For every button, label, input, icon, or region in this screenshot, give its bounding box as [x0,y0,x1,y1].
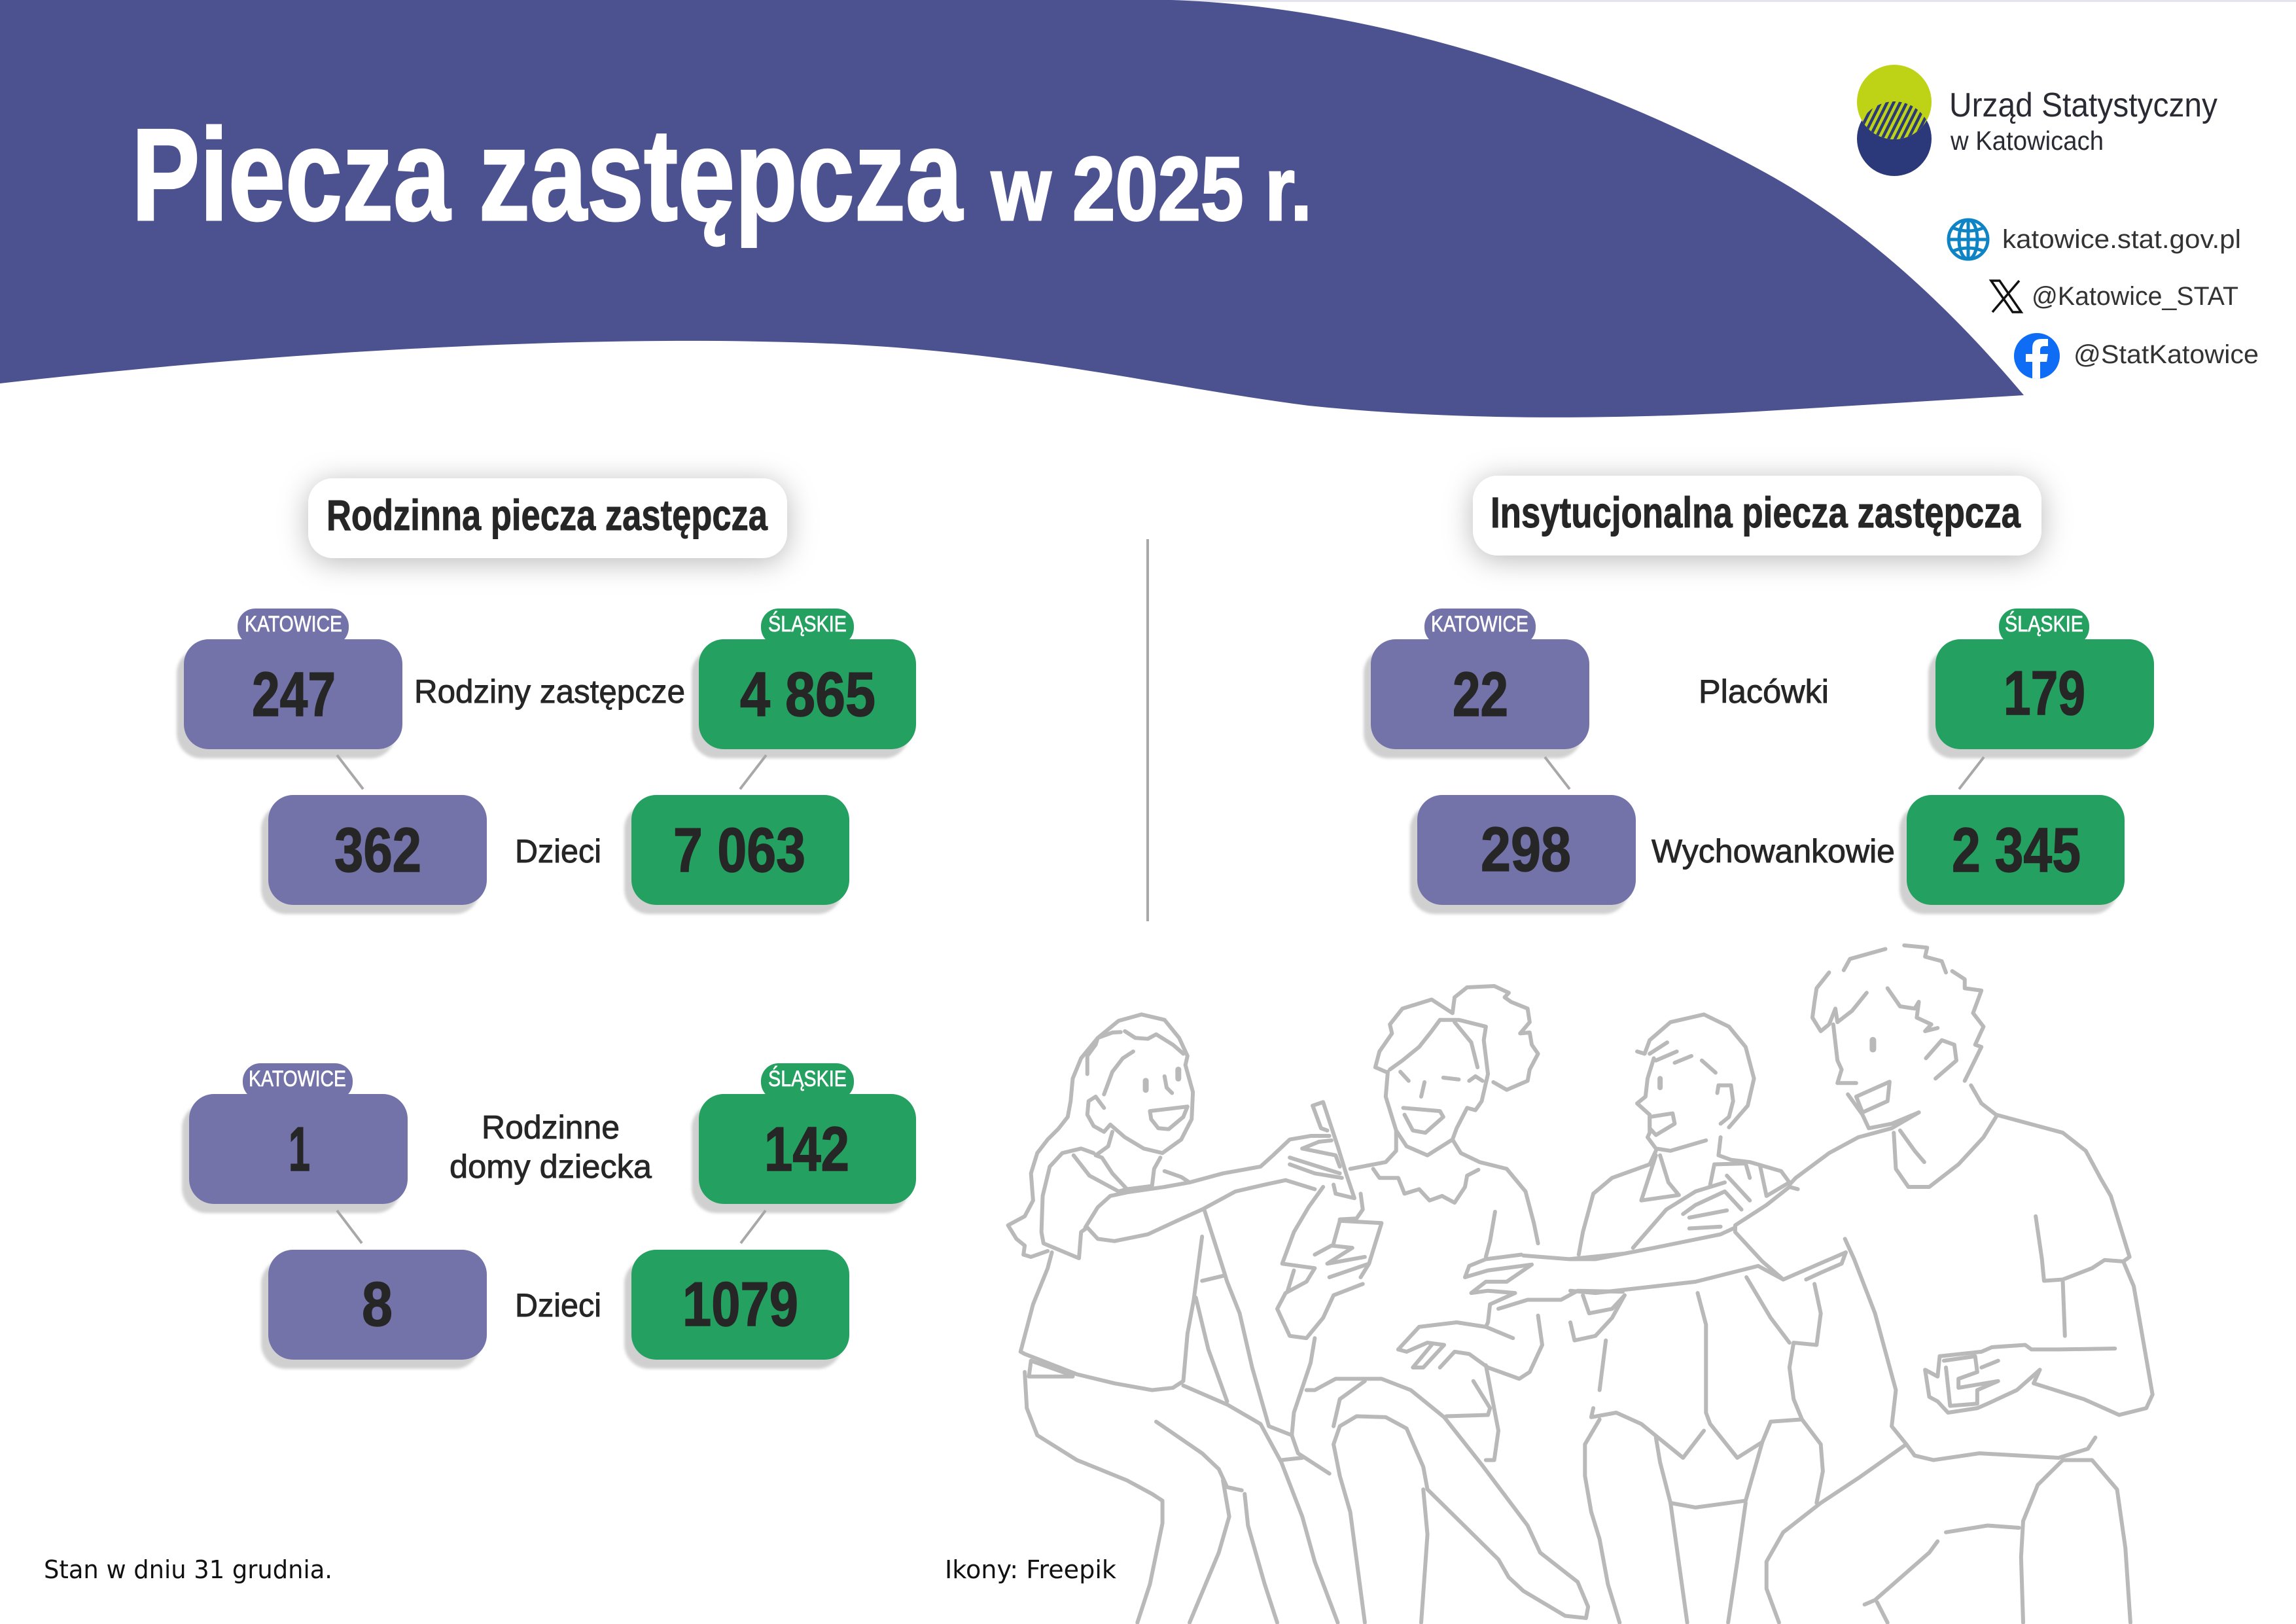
label Rodziny zastępcze: Rodziny zastępcze [414,673,685,710]
Facebook handle text: @StatKatowice [2074,340,2259,369]
connector [1545,757,1984,789]
value 1 [182,1094,408,1213]
header banner [0,0,2024,417]
panel: rodzinne domy dziecka [182,1063,916,1369]
logo: Urząd Statystyczny w Katowicach: w Katowicach [1950,126,2104,156]
footnote: icons credit: Ikony: Freepik [945,1555,1116,1584]
value 1: 1 [289,1114,310,1184]
value 22: 22 [1453,660,1508,730]
label Dzieci: Dzieci [515,833,601,870]
value 179 [1928,639,2154,758]
panel: rodziny zastępcze [177,609,916,914]
label Rodzinne domy dziecka: Rodzinne [482,1109,620,1146]
figure: boy and man [1570,945,2153,1623]
badge Katowice: KATOWICE [1431,612,1528,637]
icon: Facebook [2014,333,2060,381]
value 4 865 [692,639,916,758]
title: w 2025 r. [991,139,1312,239]
figure: two women [1008,986,1623,1623]
label Rodzinne domy dziecka: domy dziecka [450,1148,652,1185]
footnote: date: Stan w dniu 31 grudnia. [44,1555,332,1584]
value 142: 142 [764,1114,849,1184]
value 8 [261,1250,487,1369]
badge Śląskie [1999,609,2089,645]
panel: Insytucjonalna heading: Insytucjonalna piecza zastępcza [1491,488,2021,537]
value 247: 247 [252,660,336,730]
logo: Urząd Statystyczny w Katowicach [1852,65,2217,176]
value 247 [177,639,402,758]
badge Śląskie: ŚLĄSKIE [768,611,847,637]
badge Katowice: KATOWICE [249,1067,346,1091]
icon: globe [1949,220,1988,259]
panel: Rodzinna heading [308,478,787,558]
panel: Insytucjonalna heading [1473,476,2041,556]
value 2 345: 2 345 [1952,815,2081,885]
value 298 [1410,795,1636,914]
value 362: 362 [334,815,421,885]
label Rodzinne domy dziecka [450,1109,652,1185]
connector [337,755,766,789]
label Dzieci: Dzieci [515,1287,601,1324]
value 2 345 [1899,795,2125,914]
value 298: 298 [1481,815,1571,885]
badge Śląskie [761,609,854,645]
badge Śląskie [761,1063,854,1100]
value 7 063 [624,795,849,914]
value 8: 8 [362,1269,393,1339]
panel: Rodzinna heading: Rodzinna piecza zastępcza [327,491,768,539]
value 179: 179 [2004,658,2085,728]
value 1079 [624,1250,849,1369]
title: Piecza zastępcza [132,102,963,248]
connector [337,1210,766,1243]
value 362 [261,795,487,914]
value 4 865: 4 865 [740,660,875,730]
icon: X [1991,281,2021,312]
value 22 [1364,639,1589,758]
value 142 [692,1094,916,1213]
value 1079: 1079 [682,1269,798,1339]
X handle text: @Katowice_STAT [2032,282,2238,311]
badge Śląskie: ŚLĄSKIE [768,1066,847,1091]
label Wychowankowie: Wychowankowie [1651,833,1895,870]
value 7 063: 7 063 [673,815,805,885]
badge Katowice [1424,609,1536,645]
illustration: friends with phones, line art [1008,945,2153,1623]
badge Śląskie: ŚLĄSKIE [2005,611,2083,637]
divider [1146,539,1149,921]
logo: Urząd Statystyczny w Katowicach: Urząd Statystyczny [1949,86,2217,124]
website text: katowice.stat.gov.pl [2002,225,2241,254]
panel: placówki [1364,609,2154,914]
badge Katowice: KATOWICE [245,612,342,637]
badge Katowice [238,609,349,645]
label Placówki: Placówki [1699,673,1829,710]
badge Katowice [243,1063,353,1100]
